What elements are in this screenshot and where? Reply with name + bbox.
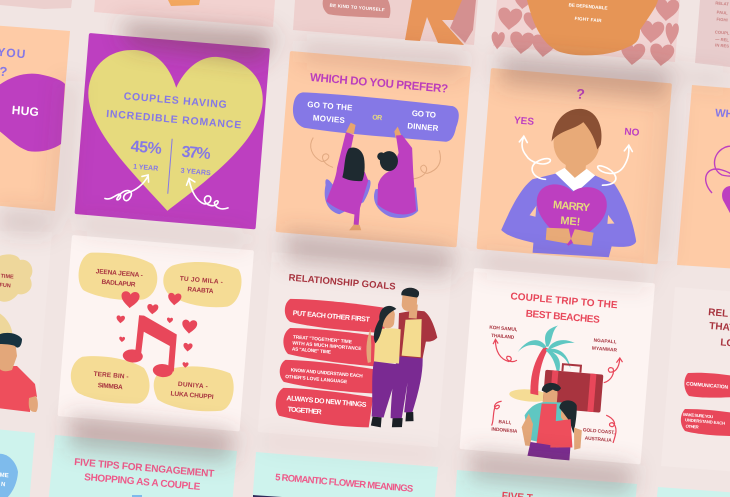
panel: far right relationship card bbox=[661, 287, 730, 472]
person right bbox=[372, 125, 425, 220]
purple shape bbox=[722, 186, 730, 215]
option text: dinner: DINNER bbox=[407, 121, 439, 133]
icon: notebook bbox=[168, 0, 200, 6]
suitcase bbox=[542, 363, 604, 413]
goal text bbox=[282, 310, 374, 420]
goal block two bbox=[681, 409, 730, 436]
arrow: left curl bbox=[105, 171, 149, 202]
bubble text: TERE BIN - bbox=[93, 371, 129, 381]
panel: bottom left mint card bbox=[0, 429, 35, 497]
title fragment bbox=[708, 307, 730, 350]
panel: top right text card bbox=[695, 0, 730, 67]
title: COUPLE TRIP TO THE bbox=[510, 291, 618, 311]
marry me text: ME! bbox=[560, 215, 581, 229]
title: SHOPPING AS A COUPLE bbox=[84, 472, 201, 493]
title: RELATIONSHIP GOALS bbox=[288, 273, 396, 293]
location labels bbox=[481, 325, 623, 444]
tips text bbox=[568, 2, 608, 23]
goal text: KNOW AND UNDERSTAND EACH bbox=[290, 367, 363, 380]
option text: movies: MOVIES bbox=[312, 113, 346, 125]
goal text two: OTHER bbox=[685, 423, 699, 430]
title: WHICH DO YOU PREFER? bbox=[310, 72, 448, 96]
yes label: YES bbox=[514, 115, 535, 128]
location labels: MYANMAR bbox=[592, 346, 618, 354]
bubble text: BADLAPUR bbox=[101, 279, 136, 289]
panel: romance stat card bbox=[75, 33, 270, 229]
bubble: duniya bbox=[152, 363, 235, 414]
panel: engagement shopping card bbox=[48, 435, 237, 497]
cloud text: TIME bbox=[0, 273, 14, 281]
bubble text: LUKA CHUPPI bbox=[170, 390, 214, 401]
cloud one bbox=[0, 254, 32, 302]
marry me text: MARRY bbox=[553, 199, 591, 214]
hug label: HUG bbox=[11, 103, 39, 119]
panel: song list card bbox=[58, 235, 254, 431]
body text: — REL bbox=[715, 36, 730, 43]
panel: which do you prefer card bbox=[276, 51, 471, 247]
cloud text bbox=[0, 273, 14, 289]
stat: 45% 1 year bbox=[129, 137, 162, 173]
squiggle arrows bbox=[486, 339, 623, 443]
bubble: tu jo mila bbox=[161, 259, 243, 310]
goal text: ALWAYS DO NEW THINGS bbox=[286, 395, 367, 409]
title: COUPLES HAVING bbox=[123, 90, 227, 111]
title bbox=[509, 291, 618, 327]
tips text: FIGHT FAIR bbox=[574, 16, 602, 23]
option text: dinner bbox=[407, 108, 440, 133]
location labels: THAILAND bbox=[491, 333, 515, 341]
goal text two: MAKE SURE YOU bbox=[683, 412, 713, 419]
panel: be kind card bbox=[293, 0, 478, 45]
body text: FIGHI bbox=[716, 17, 728, 22]
panel: relationship goals card bbox=[258, 252, 452, 447]
panel: bottom card four bbox=[656, 487, 730, 497]
goal text two: UNDERSTAND EACH bbox=[685, 417, 725, 426]
location labels: NGAPALI, bbox=[593, 338, 617, 346]
panel: hug card bbox=[0, 25, 70, 211]
question mark: ? bbox=[576, 85, 585, 102]
location labels: BALI, bbox=[498, 419, 512, 426]
arrow: right curl bbox=[596, 143, 633, 187]
pattern: hearts bbox=[491, 0, 680, 67]
title bbox=[74, 457, 216, 493]
goal text: WITH AS MUCH IMPORTANCE bbox=[292, 340, 362, 352]
goal text: TOGETHER bbox=[287, 406, 322, 416]
body text: PAUL bbox=[716, 10, 728, 16]
illustration: orange legs bbox=[405, 0, 476, 45]
bubble: jeena jeena bbox=[77, 251, 159, 303]
title: INCREDIBLE ROMANCE bbox=[106, 108, 242, 131]
option text: movies: GO TO THE bbox=[307, 100, 353, 113]
couple bbox=[360, 284, 441, 432]
panel: thought bubbles card bbox=[0, 231, 52, 412]
goal blocks bbox=[274, 297, 386, 429]
person left bbox=[322, 121, 375, 232]
illustration top bbox=[132, 495, 142, 497]
couple bbox=[519, 381, 585, 461]
hearts bbox=[113, 288, 200, 368]
title fragment: REL bbox=[708, 307, 729, 320]
purple blob bbox=[0, 74, 65, 152]
option bar bbox=[291, 91, 460, 143]
title: BEST BEACHES bbox=[525, 309, 600, 326]
goal text two bbox=[683, 412, 725, 430]
location labels: GOLD COAST, bbox=[583, 427, 616, 436]
panel: flower meanings card bbox=[252, 452, 438, 497]
goal text: OTHER'S LOVE LANGUAGE bbox=[285, 374, 348, 385]
bubble text: SIMMBA bbox=[97, 382, 123, 391]
illustration: curl right bbox=[412, 148, 441, 181]
panel: far right peach card bbox=[677, 85, 730, 269]
hands bbox=[546, 227, 594, 246]
stat: 45% 1 year: 1 YEAR bbox=[133, 164, 158, 173]
title: FIVE TIPS FOR ENGAGEMENT bbox=[74, 457, 216, 480]
stat: 37% 3 years bbox=[180, 143, 213, 177]
heart bbox=[533, 183, 608, 249]
purple swirl bbox=[706, 146, 730, 193]
option text: movies bbox=[306, 100, 353, 126]
bubble text: JEENA JEENA - bbox=[95, 268, 143, 279]
stat: 45% 1 year: 45% bbox=[130, 137, 162, 158]
label text: BE KIND TO YOURSELF bbox=[329, 3, 385, 12]
panel: beach trip card bbox=[459, 268, 655, 466]
heart bbox=[79, 46, 266, 218]
tips text: BE DEPENDABLE bbox=[568, 2, 608, 11]
title bbox=[106, 89, 243, 131]
divider bbox=[168, 139, 172, 194]
blob text bbox=[0, 473, 9, 488]
panel: marry me card bbox=[477, 68, 672, 264]
stat: 37% 3 years: 37% bbox=[181, 143, 211, 163]
bubble text: TU JO MILA - bbox=[179, 275, 223, 286]
goal block one bbox=[684, 373, 730, 398]
or label: OR bbox=[372, 114, 383, 122]
location labels: AUSTRALIA bbox=[584, 436, 612, 444]
person bbox=[500, 103, 646, 261]
body text bbox=[715, 0, 730, 49]
blob text: N bbox=[1, 482, 5, 488]
palm tree bbox=[514, 322, 576, 398]
location labels: KOH SAMUI, bbox=[489, 325, 518, 333]
panel: top pink card bbox=[94, 0, 275, 27]
bubble text bbox=[86, 268, 223, 401]
arrow: left curl bbox=[517, 136, 552, 180]
man in red shirt bbox=[0, 333, 38, 412]
option text: dinner: GO TO bbox=[412, 109, 436, 120]
panel: bottom card three bbox=[455, 470, 637, 497]
no label: NO bbox=[624, 127, 640, 139]
goal text: PUT EACH OTHER FIRST bbox=[292, 310, 371, 324]
bubble text: DUNIYA - bbox=[178, 381, 208, 390]
blue blob bbox=[0, 454, 18, 497]
body text: COUPL bbox=[715, 29, 730, 36]
goal text: TREAT "TOGETHER" TIME bbox=[293, 334, 353, 345]
orange blob bbox=[527, 0, 658, 55]
body text: IN RES bbox=[715, 42, 730, 49]
goal text: AS "ALONE" TIME bbox=[292, 346, 332, 356]
icon: music note bbox=[121, 314, 178, 378]
title: 5 ROMANTIC FLOWER MEANINGS bbox=[275, 472, 414, 495]
location labels: INDONESIA bbox=[491, 427, 518, 435]
bubble: tere bin bbox=[69, 354, 152, 405]
body text: RELAT bbox=[715, 0, 730, 7]
bubble text: RAABTA bbox=[187, 286, 214, 295]
arrow: right curl bbox=[185, 178, 230, 209]
illustration: curl left bbox=[309, 137, 335, 167]
cloud two bbox=[0, 312, 12, 340]
stat: 37% 3 years: 3 YEARS bbox=[180, 168, 211, 177]
island sand bbox=[509, 388, 550, 403]
panel: top left card bbox=[0, 0, 72, 9]
image strip bbox=[253, 495, 282, 497]
label pill bbox=[323, 0, 390, 18]
panel: hearts card bbox=[491, 0, 680, 67]
goal text one: COMMUNICATION bbox=[686, 381, 729, 391]
marry me text bbox=[551, 199, 591, 229]
